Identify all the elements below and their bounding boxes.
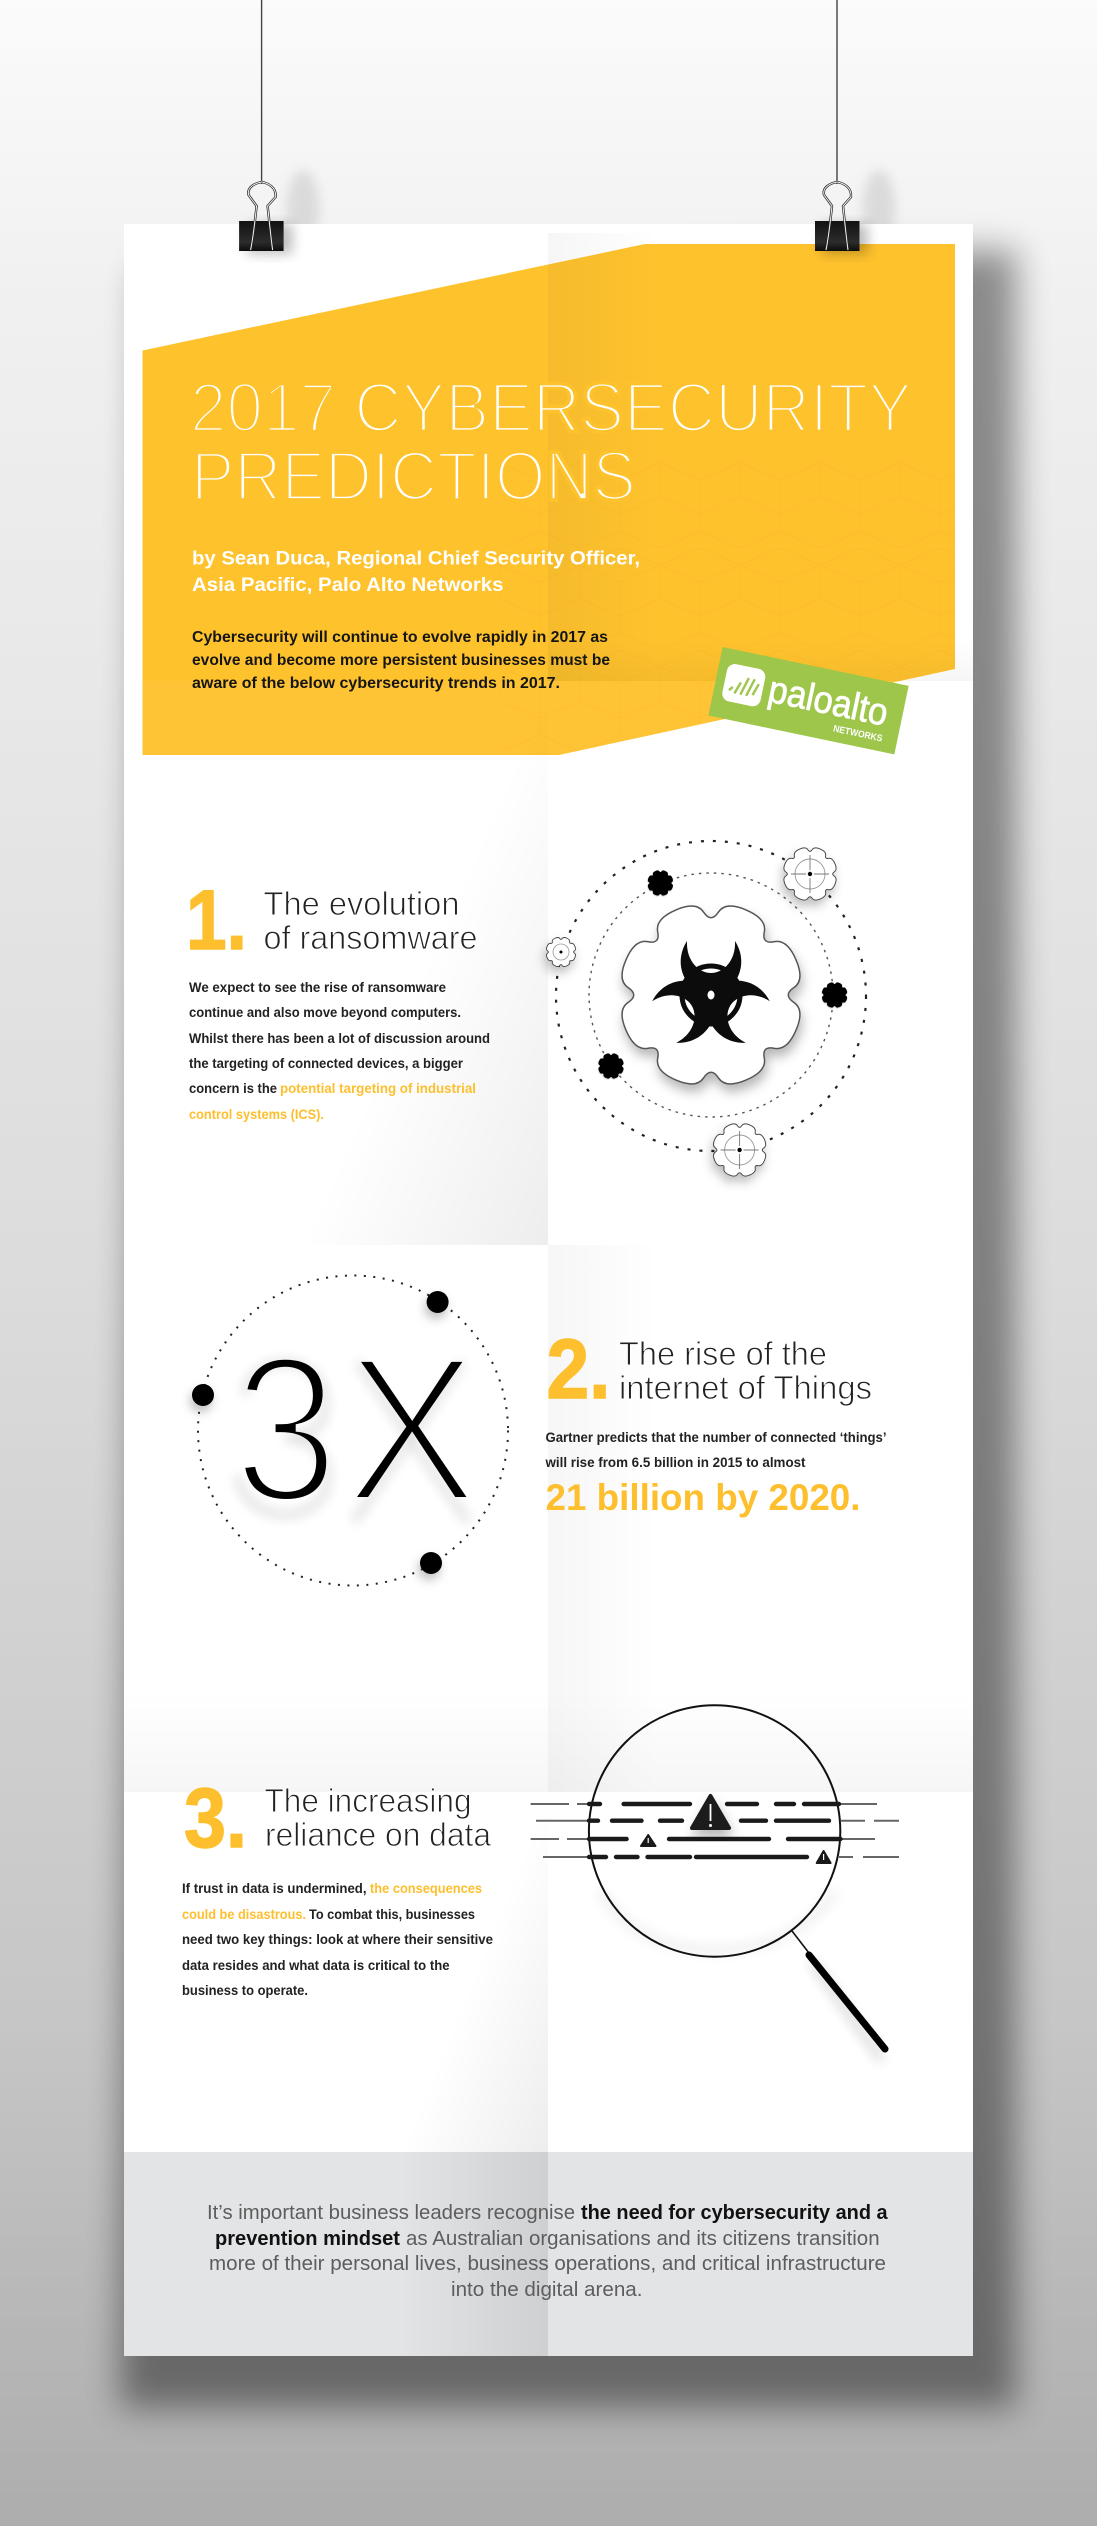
section 3 heading: The increasing [264, 1782, 472, 1819]
footer band [124, 2152, 973, 2356]
footer statement [207, 2202, 888, 2301]
section 2 heading [619, 1335, 872, 1406]
poster drop shadow [120, 170, 1016, 2408]
section 3 number: 3. [184, 1771, 247, 1865]
handle [809, 1955, 885, 2049]
byline [192, 548, 640, 596]
section 3 body text: business to operate. [182, 1982, 308, 1998]
logo wordmark: paloalto [765, 669, 892, 735]
icon: large warning triangle [692, 1796, 729, 1828]
small target gear top right [784, 848, 836, 900]
section 3 body text: To combat this, businesses [309, 1906, 475, 1922]
intro text: evolve and become more persistent businesses must be [192, 652, 610, 669]
hanging string left [261, 0, 263, 184]
icon: binder clip right [815, 182, 868, 254]
orbit dots [192, 1291, 449, 1574]
byline: by Sean Duca, Regional Chief Security Officer, [192, 548, 640, 570]
hanging string right [836, 0, 838, 184]
section 1 body text: the targeting of connected devices, a bigger [189, 1055, 464, 1071]
section 1 body text: potential targeting of industrial [280, 1080, 476, 1096]
icon: small warning triangle left [641, 1835, 656, 1846]
section 1 body text: We expect to see the rise of ransomware [189, 979, 446, 995]
section 3 body text: could be disastrous. [182, 1906, 306, 1922]
black gear 1 [648, 870, 673, 896]
section 1 number: 1. [186, 873, 247, 967]
icon: small warning triangle right [817, 1851, 831, 1863]
section 2 heading: The rise of the [619, 1335, 827, 1372]
intro text [192, 629, 610, 692]
black gear 2 [822, 982, 847, 1008]
thin data lines outside lens [531, 1804, 899, 1857]
large 3X text: 3 [234, 1314, 338, 1546]
lens [589, 1705, 840, 1957]
section 3 body text [182, 1880, 493, 1998]
handle shaft shadow [812, 1962, 882, 2060]
inner dotted orbit [589, 873, 833, 1117]
section 3 heading: reliance on data [265, 1816, 492, 1853]
black gear 3 [598, 1053, 624, 1079]
footer statement: into the digital arena. [451, 2279, 642, 2301]
footer statement: prevention mindset [215, 2228, 400, 2250]
large 3X text [234, 1314, 478, 1546]
title: PREDICTIONS [191, 437, 636, 515]
intro text: Cybersecurity will continue to evolve rapidly in 2017 as [192, 629, 608, 646]
section 1 body text: concern is the [189, 1080, 277, 1096]
logo mark [721, 663, 767, 708]
outer dotted orbit [556, 841, 866, 1151]
footer statement: the need for cybersecurity and a [581, 2202, 888, 2224]
lens shadow [600, 1890, 835, 1950]
section 1 body text: control systems (ICS). [189, 1106, 324, 1122]
section 2 heading: internet of Things [619, 1369, 872, 1406]
logo: Palo Alto Networks [708, 647, 909, 754]
section 3 body text: If trust in data is undermined, [182, 1880, 366, 1896]
logo subtext: NETWORKS [832, 723, 883, 744]
icon: binder clip left [239, 182, 293, 254]
yellow header panel [142, 244, 955, 755]
thick data lines inside lens [589, 1804, 840, 1857]
handle neck [792, 1931, 809, 1953]
title: 2017 CYBERSECURITY [190, 368, 912, 446]
section 1 body text [189, 979, 490, 1122]
section 3 body text: need two key things: look at where their sensitive [182, 1931, 493, 1947]
main gear [622, 906, 800, 1084]
section 3 heading [264, 1782, 492, 1853]
section 2 body text: Gartner predicts that the number of connected ‘things’ [546, 1429, 886, 1445]
section 3 body text: the consequences [370, 1880, 482, 1896]
section 1 illustration: biohazard gear [546, 841, 866, 1176]
section 2 body text [545, 1429, 886, 1470]
small target gear left [546, 937, 576, 967]
section 2 highlight: 21 billion by 2020. [546, 1477, 860, 1518]
footer statement: as Australian organisations and its citizens transition [406, 2228, 880, 2250]
footer statement: It’s important business leaders recognise [207, 2202, 575, 2224]
fold shading [124, 233, 973, 2356]
section 2 illustration: 3X orbit [192, 1276, 508, 1586]
section 3 body text: data resides and what data is critical to the [182, 1957, 450, 1973]
section 1 heading [264, 885, 478, 956]
byline: Asia Pacific, Palo Alto Networks [192, 575, 504, 596]
section 1 heading: of ransomware [264, 919, 478, 956]
small target gear bottom [713, 1124, 766, 1176]
section 2 body text: will rise from 6.5 billion in 2015 to almost [545, 1454, 806, 1470]
poster sheet [124, 224, 973, 2356]
dotted orbit [198, 1276, 508, 1586]
section 2 number: 2. [546, 1322, 610, 1416]
section 1 body text: Whilst there has been a lot of discussion around [189, 1030, 490, 1046]
intro text: aware of the below cybersecurity trends in 2017. [192, 675, 560, 692]
large 3X text: X [345, 1314, 478, 1546]
section 3 illustration: magnifying glass over data lines [531, 1705, 899, 2060]
section 1 heading: The evolution [264, 885, 460, 922]
title [190, 368, 912, 515]
icon: biohazard [649, 941, 773, 1048]
footer statement: more of their personal lives, business operations, and critical infrastructure [209, 2253, 886, 2275]
section 1 body text: continue and also move beyond computers. [189, 1004, 461, 1020]
soft shadow of 3X [238, 1362, 468, 1522]
